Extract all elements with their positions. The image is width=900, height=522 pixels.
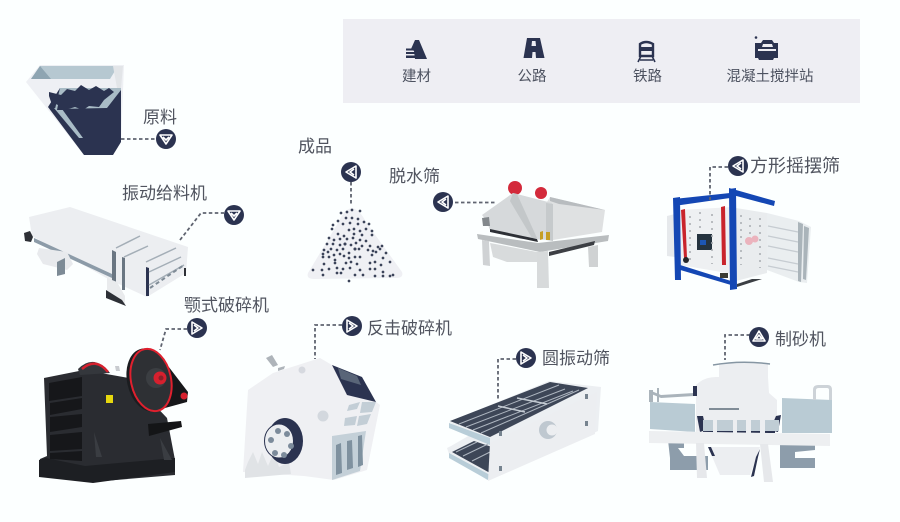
application: railway: 铁路 [633,68,662,85]
label: dewatering screen: 脱水筛 [389,167,440,186]
connector: jaw crusher [160,329,187,350]
connector: sand making machine [725,335,750,360]
panel: applications [343,19,860,103]
badge: dewatering screen [433,192,453,212]
connector: vibrating feeder [180,213,224,240]
label: circular vibrating screen: 圆振动筛 [542,349,610,368]
dots: gravel [312,209,394,282]
machine: sand making machine [649,362,832,482]
connector: dewatering screen [455,202,495,204]
machine: vibrating feeder [24,207,188,306]
connector: square swing screen [710,167,728,200]
label: raw material: 原料 [143,108,177,127]
machine: raw material hopper [26,65,124,155]
badge: raw material [156,129,176,149]
machine: finished product pile [308,208,402,282]
application: concrete mixing: 混凝土搅拌站 [726,68,814,85]
label: vibrating feeder: 振动给料机 [122,184,207,203]
label: impact crusher: 反击破碎机 [367,319,452,338]
application: highway [518,38,547,85]
label: finished product: 成品 [298,137,332,156]
badge: vibrating feeder [224,205,244,225]
label: jaw crusher: 颚式破碎机 [184,296,269,315]
badge: circular vibrating screen [516,348,536,368]
label: sand making machine: 制砂机 [775,330,826,349]
application: railway [633,42,662,85]
application: building materials: 建材 [402,68,431,85]
machine: dewatering screen [477,181,609,288]
badge: impact crusher [342,316,362,336]
machine: square swing screen [667,188,811,290]
badge: jaw crusher [187,318,207,338]
connector: circular vibrating screen [498,359,516,400]
badge: square swing screen [728,156,748,176]
machine: circular vibrating screen [447,381,601,481]
machine: impact crusher [243,355,380,480]
machine: jaw crusher [39,344,188,483]
application: building materials [402,40,431,85]
connector: raw material [121,138,156,140]
application: highway: 公路 [518,68,547,85]
connector: finished product [350,182,352,206]
label: square swing screen: 方形摇摆筛 [750,156,840,176]
connector: impact crusher [315,325,342,359]
badge: sand making machine [749,327,769,347]
badge: finished product [341,162,361,182]
application: concrete mixing [726,36,814,85]
